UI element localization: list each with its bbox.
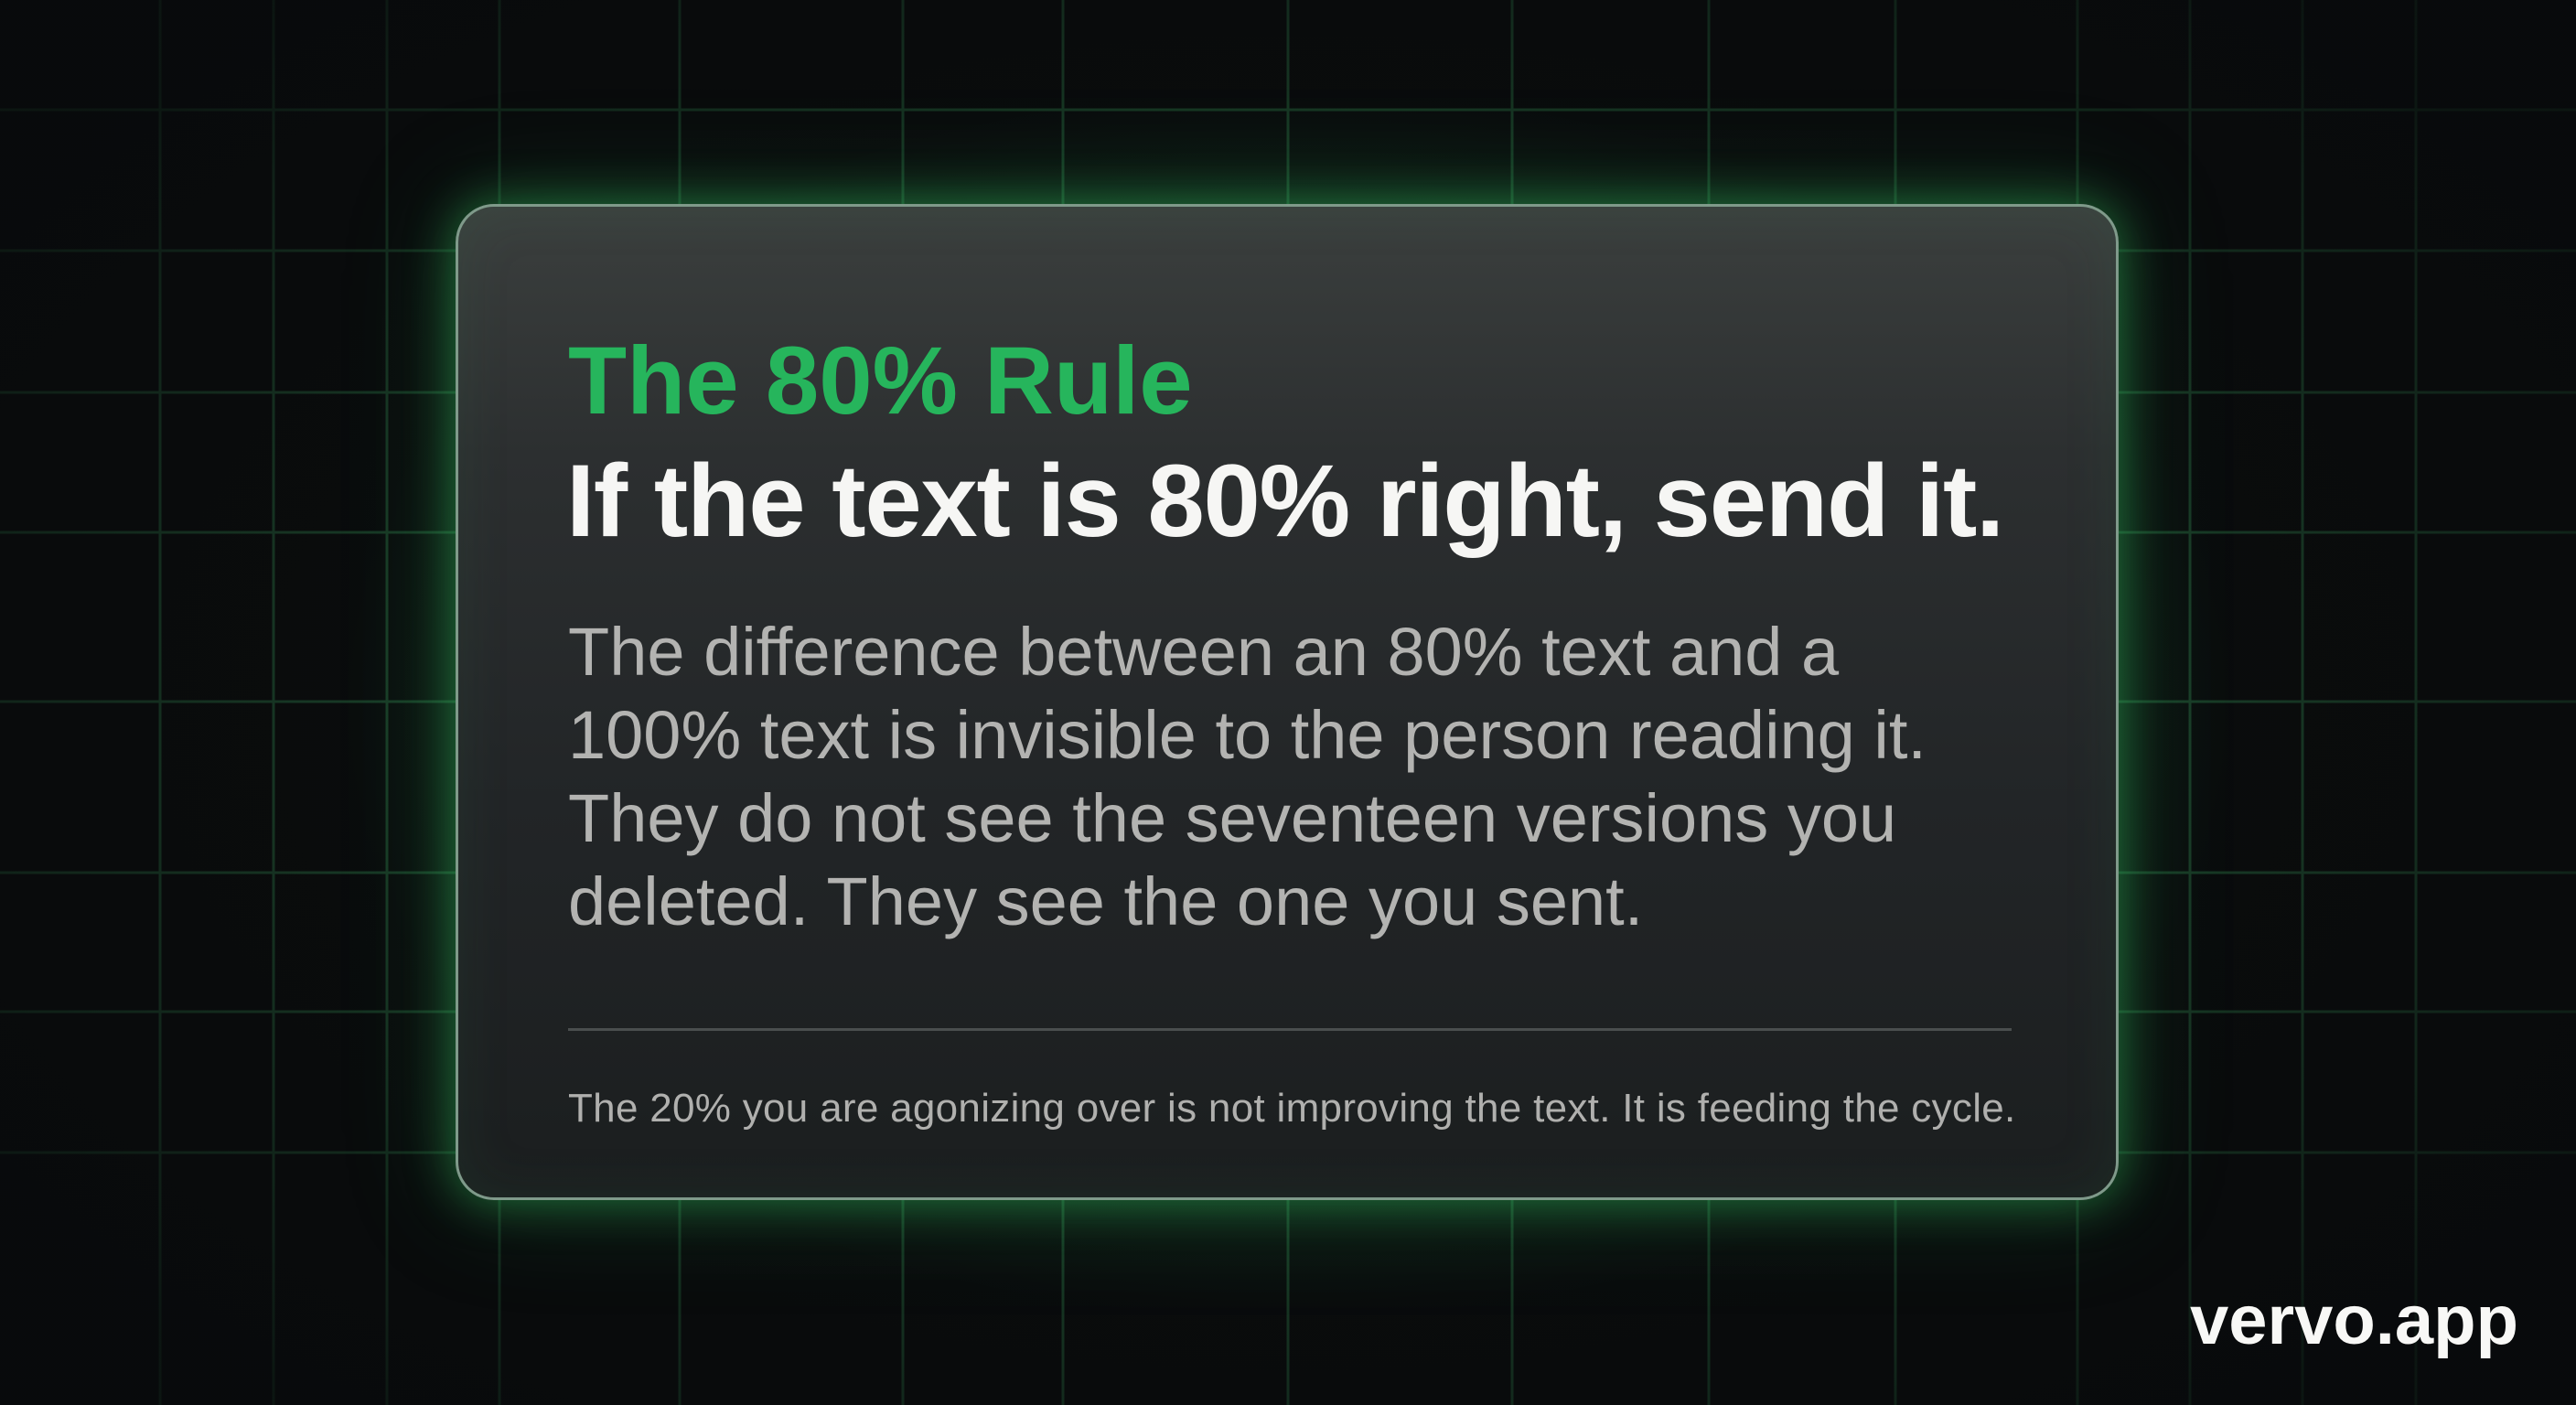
text block: body paragraph: deleted. They see the one you sent. [568, 863, 1643, 939]
text block: body paragraph: They do not see the seventeen versions you [568, 780, 1896, 856]
text block: body paragraph: The difference between an 80% text and a [568, 614, 1839, 690]
text block: body paragraph [568, 614, 1927, 939]
text block: footer note: The 20% you are agonizing over is not improving the text. It is feeding the cycle. [568, 1086, 2016, 1131]
brand: vervo.app: vervo.app [2190, 1282, 2518, 1359]
heading: The 80% Rule: The 80% Rule [568, 327, 1193, 434]
panel: main card [456, 204, 2119, 1200]
subheading: If the text is 80% right, send it.: If the text is 80% right, send it. [566, 444, 2003, 558]
green glow behind card [348, 101, 2228, 1308]
text block: body paragraph: 100% text is invisible to the person reading it. [568, 697, 1927, 773]
